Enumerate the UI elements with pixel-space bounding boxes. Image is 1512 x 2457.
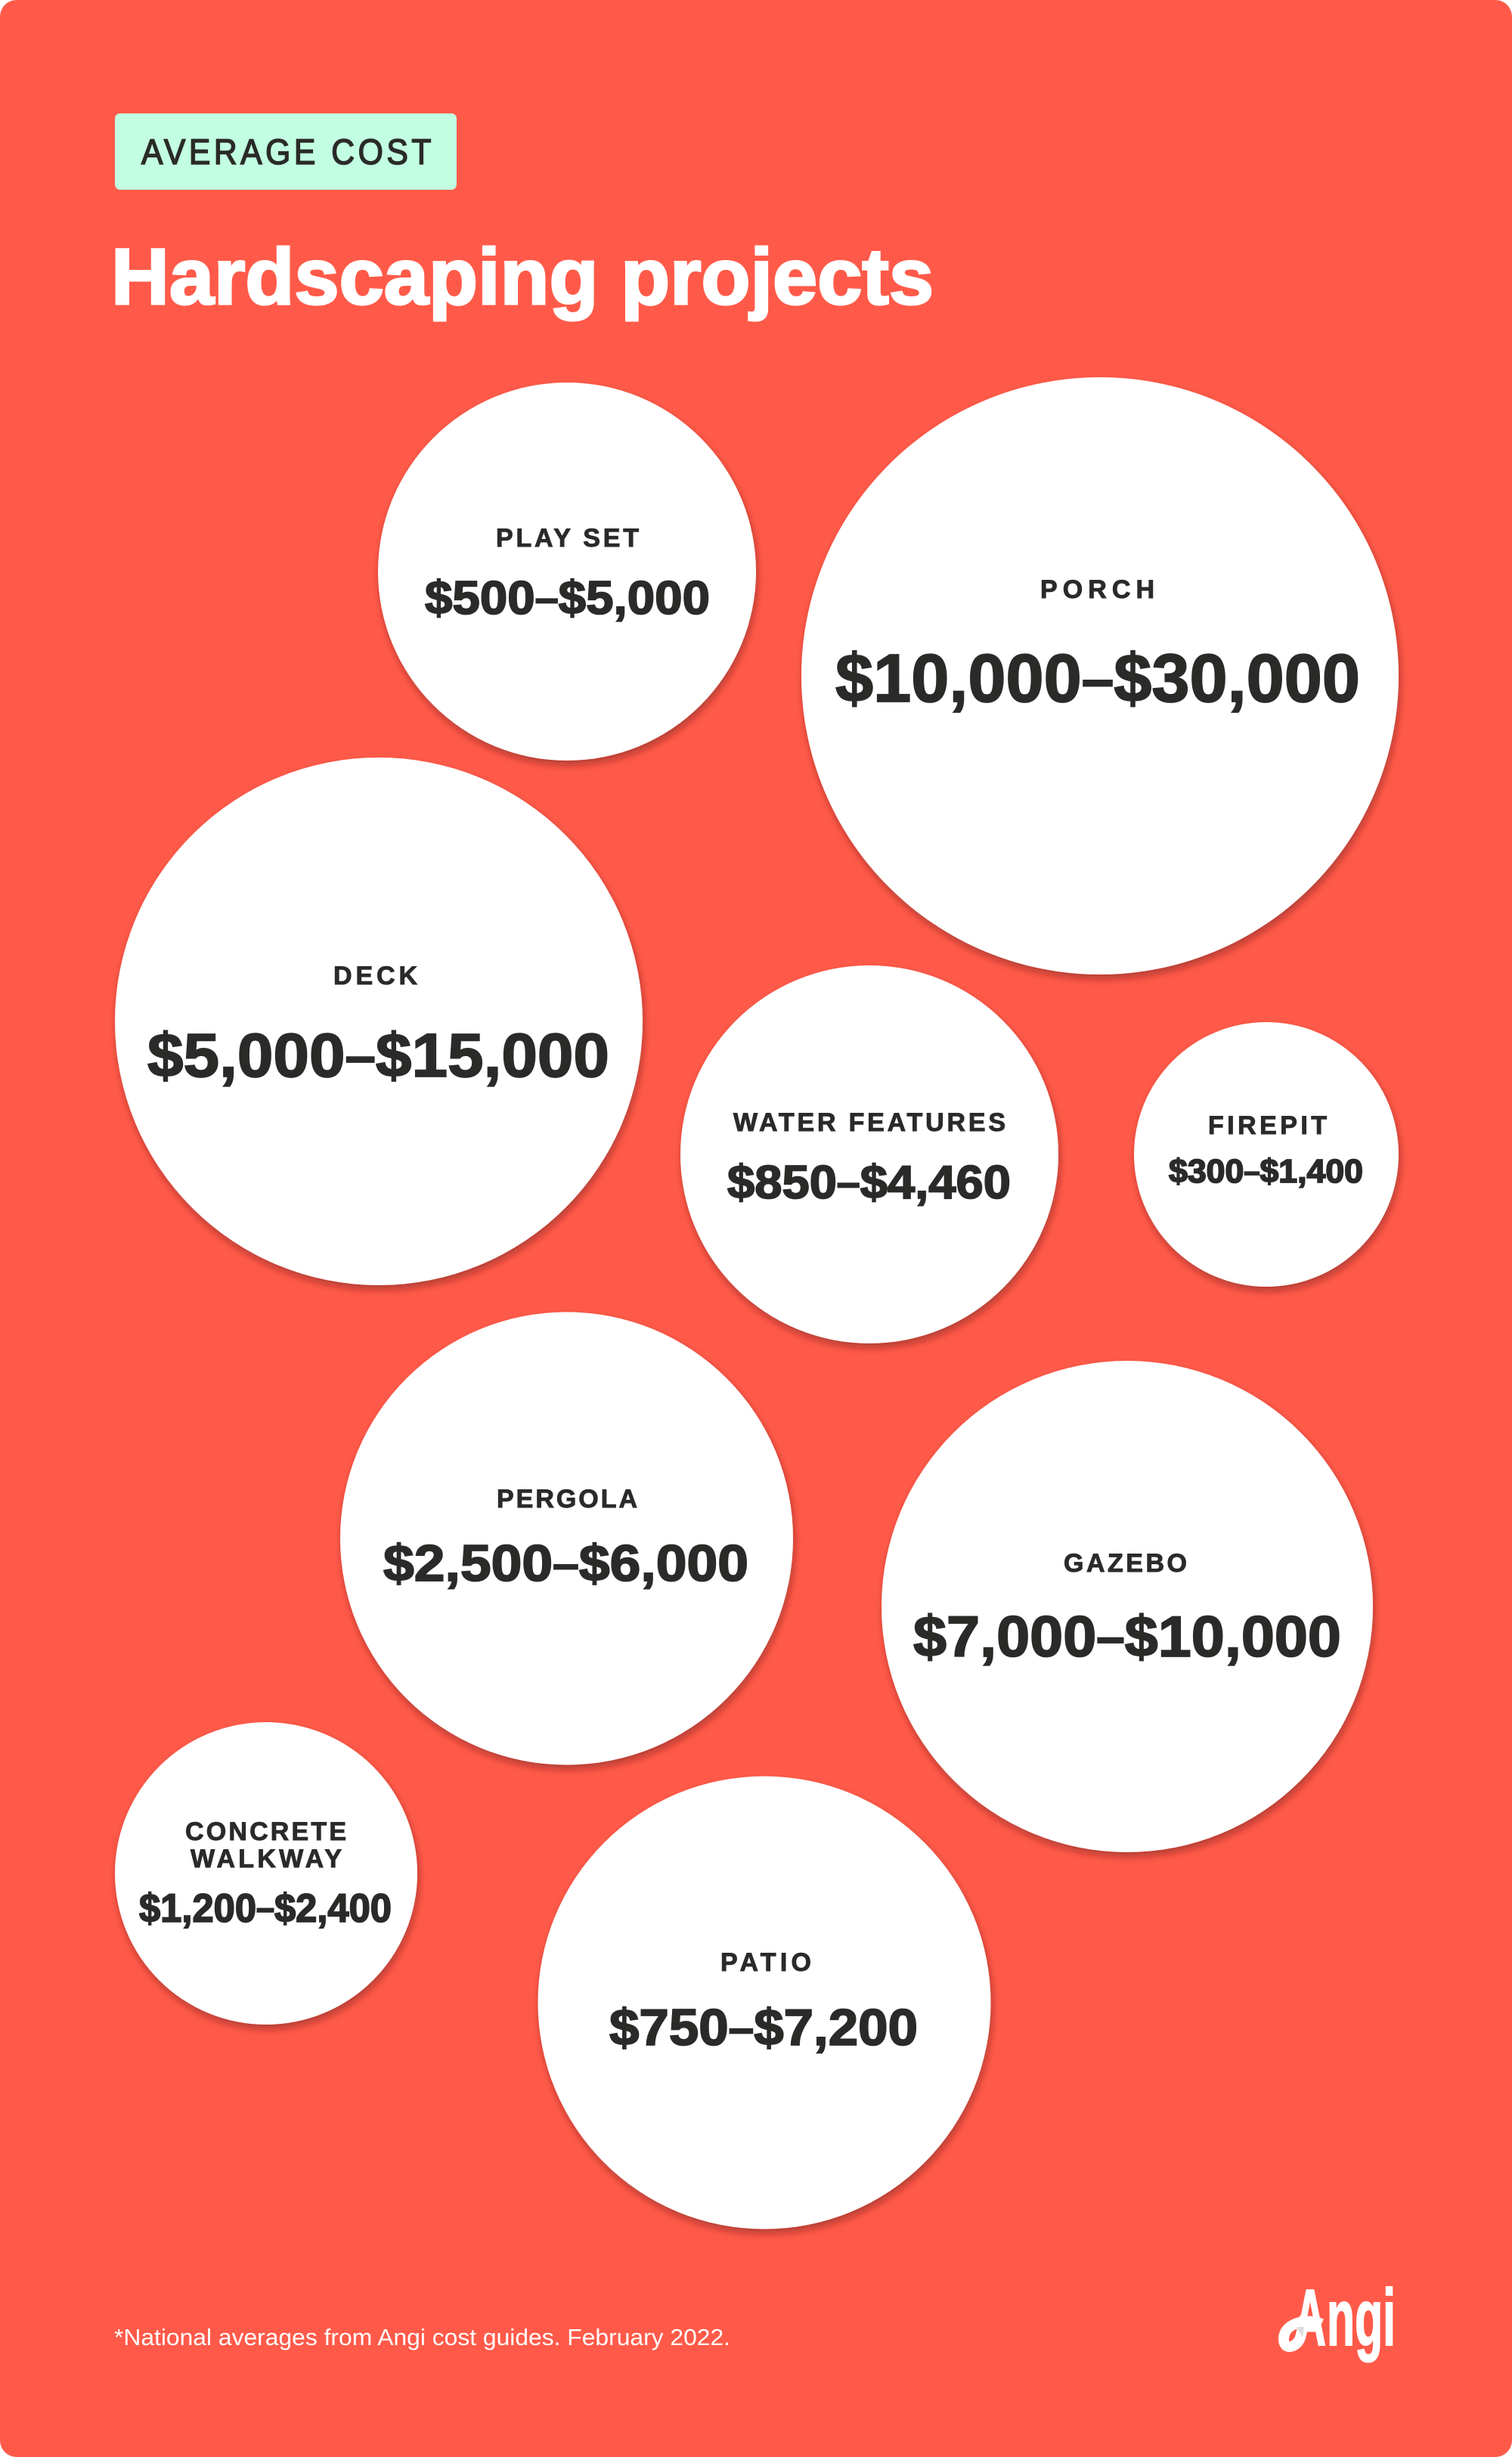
circle: water features: –: [837, 1160, 860, 1205]
circle: concrete walkway: –: [256, 1888, 274, 1927]
circle: porch: $30,000: [1114, 641, 1360, 717]
circle: porch: PORCH: [1040, 575, 1154, 604]
circle: gazebo: GAZEBO: [1064, 1549, 1187, 1578]
circle: gazebo: –: [1096, 1610, 1125, 1664]
circle: deck: –: [345, 1026, 376, 1085]
circle: pergola: [340, 1312, 793, 1765]
circle: firepit: $1,400: [1259, 1153, 1363, 1190]
circle: water features: $850: [727, 1157, 832, 1209]
circle: concrete walkway: [115, 1722, 417, 2025]
circle: play set: $5,000: [559, 572, 710, 624]
circle: pergola: $2,500: [383, 1535, 541, 1592]
circle: play set: [378, 383, 756, 761]
circle: water features: $4,460: [860, 1157, 1011, 1209]
circle: porch: –: [1082, 647, 1114, 711]
circle: play set: $500: [425, 572, 529, 624]
circle: patio: $750: [609, 1999, 723, 2056]
circle: patio: [538, 1777, 990, 2229]
circle: patio: $7,200: [754, 1999, 918, 2056]
circle: firepit: [1134, 1022, 1399, 1287]
circle: firepit: –: [1244, 1155, 1259, 1187]
circle: water features: WATER FEATURES: [733, 1108, 1005, 1137]
logo: Angi: A: [1294, 2273, 1326, 2362]
footnote: *National averages from Angi cost guides. February 2022.: [114, 2324, 730, 2350]
circle: firepit: $300: [1169, 1153, 1243, 1190]
circle: concrete walkway: WALKWAY: [191, 1845, 342, 1873]
circle: firepit: FIREPIT: [1208, 1111, 1327, 1140]
circle: pergola: –: [553, 1540, 579, 1588]
circle: play set: –: [535, 576, 559, 621]
circle: deck: $15,000: [376, 1021, 609, 1090]
circle: concrete walkway: $1,200: [139, 1886, 262, 1931]
circle: pergola: $6,000: [579, 1535, 748, 1592]
circle: deck: DECK: [333, 962, 417, 990]
badge: average cost: AVERAGE COST: [141, 132, 435, 172]
circle: deck: [115, 758, 643, 1285]
circle: gazebo: $10,000: [1125, 1605, 1341, 1669]
circle: gazebo: $7,000: [913, 1605, 1089, 1669]
circle: patio: PATIO: [720, 1948, 811, 1977]
circle: porch: $10,000: [835, 641, 1081, 717]
circle: porch: [801, 377, 1399, 974]
circle: play set: PLAY SET: [496, 524, 639, 553]
circle: concrete walkway: CONCRETE: [185, 1817, 346, 1846]
logo: Angi: [1284, 2273, 1396, 2362]
logo: Angi: ngi: [1327, 2273, 1396, 2362]
circle: deck: $5,000: [147, 1021, 337, 1090]
badge: average cost: [115, 113, 457, 190]
circle: water features: [680, 965, 1058, 1343]
title: Hardscaping projects: [111, 233, 934, 321]
circle: concrete walkway: $2,400: [274, 1886, 392, 1931]
circle: pergola: PERGOLA: [497, 1485, 637, 1514]
circle: gazebo: [881, 1361, 1373, 1852]
circle: patio: –: [729, 2004, 754, 2053]
